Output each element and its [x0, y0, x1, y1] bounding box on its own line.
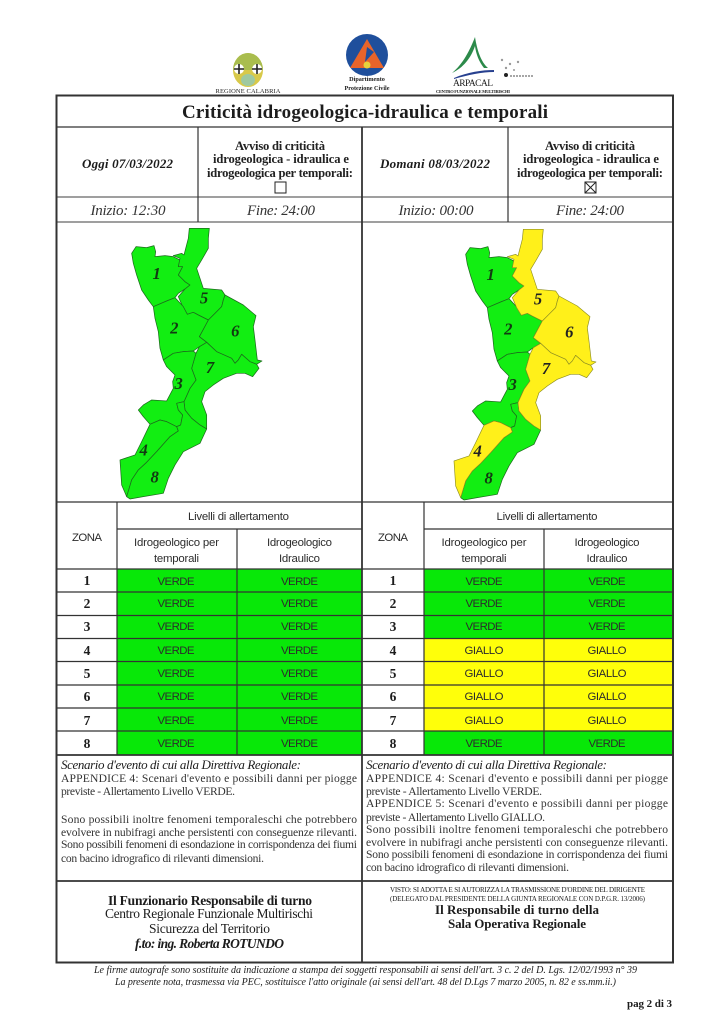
panel: tomorrow header: idrogeologica per temporali:	[517, 166, 663, 180]
table: today alert levels: VERDE	[158, 621, 195, 633]
time row: Fine: 24:00	[246, 203, 316, 219]
table: today alert levels: VERDE	[281, 621, 318, 633]
time row: Fine: 24:00	[555, 203, 624, 219]
map: today: 6	[231, 322, 240, 341]
signature: operations room: Sala Operativa Regionale	[448, 916, 586, 931]
panel: today header	[82, 139, 353, 193]
logo: Dipartimento Protezione Civile: Dipartimento	[349, 76, 385, 83]
table: tomorrow alert levels: VERDE	[588, 738, 626, 750]
table: today alert levels: VERDE	[281, 691, 318, 703]
table: tomorrow alert levels: Idraulico	[586, 553, 628, 565]
table: tomorrow alert levels: 2	[390, 596, 397, 611]
title: Criticità idrogeologica-idraulica e temporali	[182, 102, 548, 123]
signature: operations room: Il Responsabile di turno della	[435, 902, 600, 917]
map: today: 3	[173, 374, 183, 393]
table: tomorrow alert levels: GIALLO	[464, 715, 504, 727]
text block: scenario tomorrow: Sono possibili fenomeni di esondazione in corrispondenza dei fiumi	[366, 848, 668, 861]
text block: scenario today: APPENDICE 4: Scenari d'evento e possibili danni per piogge	[61, 772, 357, 785]
table: today alert levels: Idrogeologico per	[134, 537, 219, 549]
table: today alert levels: 6	[84, 689, 91, 704]
text block: scenario tomorrow: APPENDICE 4: Scenari d'evento e possibili danni per piogge	[366, 772, 668, 785]
table: today alert levels: VERDE	[158, 576, 195, 588]
footnote: La presente nota, trasmessa via PEC, sostituisce l'atto originale (ai sensi dell'art. 48 del D.Lgs 7 marzo 2005, n. 82 e ss.mm.ii.)	[114, 977, 617, 988]
table: tomorrow alert levels: GIALLO	[464, 668, 504, 680]
table green and yellow cells	[117, 569, 673, 755]
table: today alert levels: 8	[84, 736, 91, 751]
table: tomorrow alert levels: VERDE	[466, 598, 503, 610]
panel: tomorrow header	[379, 139, 663, 193]
table: today alert levels: Idrogeologico	[267, 537, 332, 549]
table: today alert levels: VERDE	[158, 668, 195, 680]
map: tomorrow: 3	[507, 375, 517, 394]
logo: Dipartimento Protezione Civile	[344, 34, 390, 92]
time row: Inizio: 12:30	[90, 203, 166, 219]
table: today alert levels: VERDE	[281, 598, 318, 610]
table: tomorrow alert levels: Idrogeologico per	[442, 537, 527, 549]
time row	[90, 203, 624, 219]
text block: scenario today: Sono possibili fenomeni di esondazione in corrispondenza dei fiumi	[61, 838, 357, 851]
panel: today header: Avviso di criticità	[235, 139, 326, 153]
map: tomorrow: 7	[542, 359, 551, 378]
map: today	[120, 228, 262, 499]
table: today alert levels: VERDE	[158, 598, 195, 610]
table: tomorrow alert levels: VERDE	[588, 576, 626, 588]
table: today alert levels: 4	[84, 643, 91, 658]
table: tomorrow alert levels	[378, 511, 640, 751]
table: today alert levels: 1	[84, 573, 91, 588]
text block: scenario today: Sono possibili inoltre fenomeni temporaleschi che potrebbero	[61, 813, 357, 826]
time row: Inizio: 00:00	[398, 203, 474, 219]
table: tomorrow alert levels: GIALLO	[588, 715, 627, 727]
logo: ARPACAL: CENTRO FUNZIONALE MULTIRISCHI	[436, 89, 510, 94]
panel: tomorrow header: Domani 08/03/2022	[379, 156, 490, 171]
signature: duty officer: f.to: ing. Roberta ROTUNDO	[135, 936, 284, 951]
table: tomorrow alert levels: VERDE	[588, 621, 626, 633]
table: tomorrow alert levels: GIALLO	[588, 691, 627, 703]
text block: scenario tomorrow: APPENDICE 5: Scenari d'evento e possibili danni per piogge	[366, 797, 668, 810]
map: tomorrow: 6	[565, 323, 574, 342]
map: today: 2	[169, 318, 178, 337]
table: today alert levels: VERDE	[281, 645, 318, 657]
signature: operations room: (DELEGATO DAL PRESIDENTE DELLA GIUNTA REGIONALE CON D.P.G.R. 13/2006)	[390, 895, 646, 903]
table: today alert levels: VERDE	[281, 715, 318, 727]
text block: scenario tomorrow: Scenario d'evento di cui alla Direttiva Regionale:	[366, 757, 607, 772]
table: today alert levels: Livelli di allertamento	[188, 511, 289, 523]
table: today alert levels: 3	[84, 619, 91, 634]
table: today alert levels: 5	[84, 666, 91, 681]
table: today alert levels: VERDE	[158, 738, 195, 750]
map: today: 4	[138, 441, 148, 460]
table: today alert levels	[72, 511, 332, 751]
signature: operations room: VISTO: SI ADOTTA E SI AUTORIZZA LA TRASMISSIONE D'ORDINE DEL DIRIGENTE	[390, 886, 645, 894]
map: today: 7	[206, 358, 215, 377]
logo: Regione Calabria: REGIONE CALABRIA	[216, 88, 281, 95]
table: tomorrow alert levels: 5	[390, 666, 397, 681]
logo: Dipartimento Protezione Civile: Protezione Civile	[344, 85, 390, 92]
logo: Regione Calabria	[216, 53, 281, 95]
table: tomorrow alert levels: GIALLO	[588, 668, 627, 680]
table: tomorrow alert levels: VERDE	[466, 576, 503, 588]
table: tomorrow alert levels: temporali	[462, 553, 506, 565]
text block: scenario today: con bacino idrografico di rilevanti dimensioni.	[61, 852, 264, 865]
signature: duty officer	[105, 893, 313, 951]
text block: scenario tomorrow: previste - Allertamento Livello GIALLO.	[366, 811, 545, 824]
table: today alert levels: VERDE	[281, 576, 318, 588]
map: today: 8	[150, 467, 159, 486]
text block: scenario today: Scenario d'evento di cui alla Direttiva Regionale:	[61, 757, 301, 772]
table: tomorrow alert levels: 1	[390, 573, 397, 588]
map: tomorrow: 8	[484, 468, 493, 487]
text block: scenario today: previste - Allertamento Livello VERDE.	[61, 785, 235, 798]
table: today alert levels: 2	[84, 596, 91, 611]
table: today alert levels: VERDE	[281, 738, 318, 750]
text block: scenario tomorrow: previste - Allertamento Livello VERDE.	[366, 785, 542, 798]
table: tomorrow alert levels: GIALLO	[588, 645, 627, 657]
signature: duty officer: Sicurezza del Territorio	[149, 921, 270, 936]
text block: scenario tomorrow: con bacino idrografico di rilevanti dimensioni.	[366, 861, 569, 874]
text block: scenario today	[61, 757, 357, 865]
table: tomorrow alert levels: Livelli di allertamento	[496, 511, 598, 523]
table: today alert levels: VERDE	[158, 715, 195, 727]
text block: scenario tomorrow: evolvere in nubifragi anche persistenti con conseguenze rilevanti.	[366, 836, 668, 849]
signature: duty officer: Centro Regionale Funzionale Multirischi	[105, 906, 313, 921]
table: today alert levels: ZONA	[72, 532, 102, 544]
map: today: 1	[152, 264, 161, 283]
text block: scenario tomorrow	[366, 757, 668, 874]
panel: today header: Oggi 07/03/2022	[82, 156, 174, 171]
table: tomorrow alert levels: VERDE	[466, 621, 503, 633]
table: tomorrow alert levels: Idrogeologico	[574, 537, 640, 549]
map: tomorrow: 5	[534, 289, 542, 308]
footnote: Le firme autografe sono sostituite da indicazione a stampa dei soggetti responsabili ai sensi dell'art. 3 c. 2 del D. Lgs. 12/02/1993 n° 39	[93, 965, 637, 976]
table: today alert levels: temporali	[154, 553, 199, 565]
map: tomorrow: 4	[472, 442, 482, 461]
table: tomorrow alert levels: ZONA	[378, 532, 408, 544]
map: tomorrow	[454, 229, 596, 500]
panel: today header: idrogeologica - idraulica e	[213, 152, 349, 166]
table: tomorrow alert levels: 3	[390, 619, 397, 634]
table: today alert levels: 7	[84, 713, 91, 728]
text block: scenario tomorrow: Sono possibili inoltre fenomeni temporaleschi che potrebbero	[366, 823, 668, 836]
table: tomorrow alert levels: 4	[390, 643, 397, 658]
logo: ARPACAL	[436, 37, 534, 94]
map: tomorrow: 2	[503, 319, 512, 338]
text block: scenario today: evolvere in nubifragi anche persistenti con conseguenze rilevanti.	[61, 826, 357, 839]
table: tomorrow alert levels: 8	[390, 736, 397, 751]
signature: operations room	[390, 886, 646, 931]
map: tomorrow: 1	[486, 265, 495, 284]
map: today: 5	[200, 288, 208, 307]
table: tomorrow alert levels: GIALLO	[464, 645, 504, 657]
table grid lines	[56, 96, 673, 963]
table: tomorrow alert levels: GIALLO	[464, 691, 504, 703]
table: today alert levels: VERDE	[281, 668, 318, 680]
table: today alert levels: Idraulico	[279, 553, 320, 565]
panel: tomorrow header: Avviso di criticità	[545, 139, 636, 153]
panel: today header: idrogeologica per temporali:	[207, 166, 353, 180]
page number: pag 2 di 3	[627, 998, 672, 1010]
table: tomorrow alert levels: VERDE	[588, 598, 626, 610]
logo: ARPACAL: ARPACAL	[453, 79, 493, 89]
table: tomorrow alert levels: VERDE	[466, 738, 503, 750]
footnote	[93, 965, 637, 988]
table: today alert levels: VERDE	[158, 645, 195, 657]
panel: tomorrow header: idrogeologica - idraulica e	[523, 152, 659, 166]
table: today alert levels: VERDE	[158, 691, 195, 703]
table: tomorrow alert levels: 6	[390, 689, 397, 704]
signature: duty officer: Il Funzionario Responsabile di turno	[108, 893, 312, 908]
table: tomorrow alert levels: 7	[390, 713, 397, 728]
